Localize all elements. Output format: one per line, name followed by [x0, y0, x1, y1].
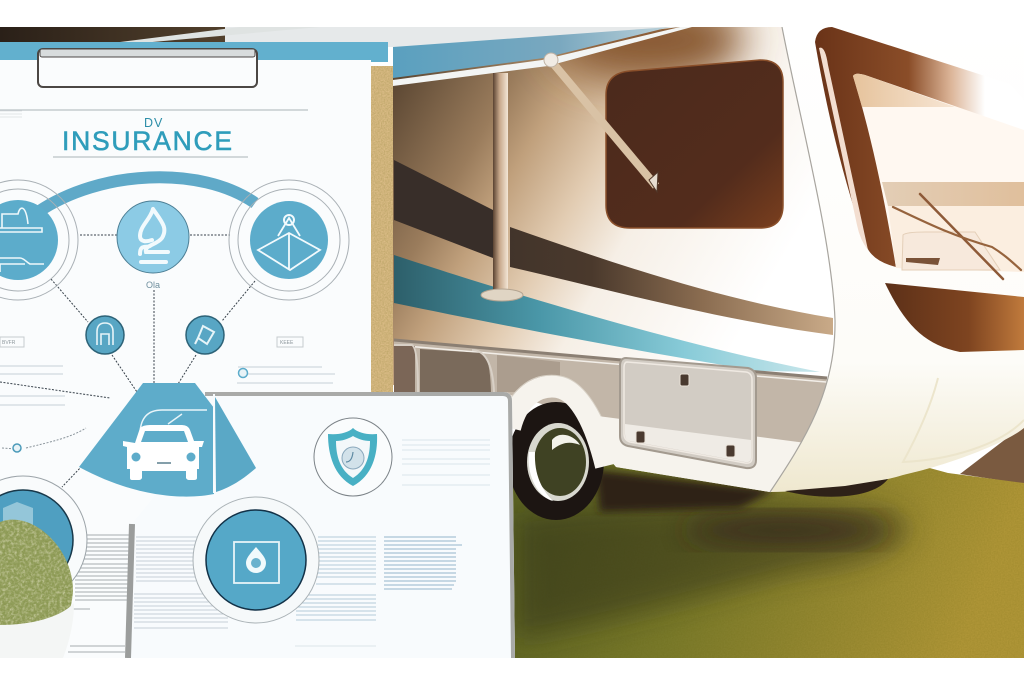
- tablet: [125, 392, 515, 658]
- van shadow on grass: [515, 470, 909, 640]
- awning: [393, 27, 692, 86]
- tablet text columns: [134, 440, 490, 646]
- lower skirt band: [394, 341, 827, 445]
- connecting dashed lines: [0, 234, 256, 488]
- icon: small left circle: [86, 316, 124, 354]
- blue car badge: [79, 383, 256, 497]
- wheel: [508, 402, 604, 520]
- compartment door: [620, 358, 756, 468]
- paper text lines: [0, 111, 335, 652]
- small labels: BVFR: [2, 340, 16, 346]
- title: INSURANCE: [62, 126, 232, 156]
- front air intake: [885, 283, 1024, 352]
- small labels: [0, 337, 303, 347]
- van front cap: [770, 27, 1024, 497]
- icon: small right circle: [186, 316, 224, 354]
- marker dot: [238, 368, 248, 378]
- marker dot left: [13, 444, 21, 452]
- icon: left policy circle: [0, 180, 78, 300]
- title: DV: [144, 116, 163, 130]
- teal stripe: [394, 255, 820, 372]
- icon: right roof circle: [229, 180, 349, 300]
- arc connector: [38, 177, 255, 212]
- windshield: [815, 27, 1024, 272]
- trees behind van: [960, 425, 1024, 484]
- dark stripe: [394, 160, 493, 258]
- support pole: [481, 73, 523, 301]
- van side body: [393, 0, 835, 492]
- background strip: [0, 27, 678, 47]
- clipboard paper base: [0, 42, 393, 392]
- wheel arch and sill: [500, 375, 806, 492]
- grass field: [500, 460, 1024, 658]
- wipers: [893, 194, 1021, 279]
- icon: center flame circle: [117, 201, 189, 273]
- icon: car: [123, 410, 207, 480]
- icon: document circle: [193, 497, 319, 623]
- icon: shield circle: [314, 418, 392, 496]
- icon: lower left circle: [0, 476, 88, 582]
- clipboard clip: [38, 49, 257, 87]
- awning arm: [544, 53, 658, 192]
- small caption: Ola: [146, 280, 160, 290]
- plant in bowl: [0, 520, 74, 658]
- small labels: KEEE: [280, 340, 294, 346]
- title rules: [0, 110, 308, 157]
- side window: [606, 60, 783, 228]
- title: [64, 118, 232, 150]
